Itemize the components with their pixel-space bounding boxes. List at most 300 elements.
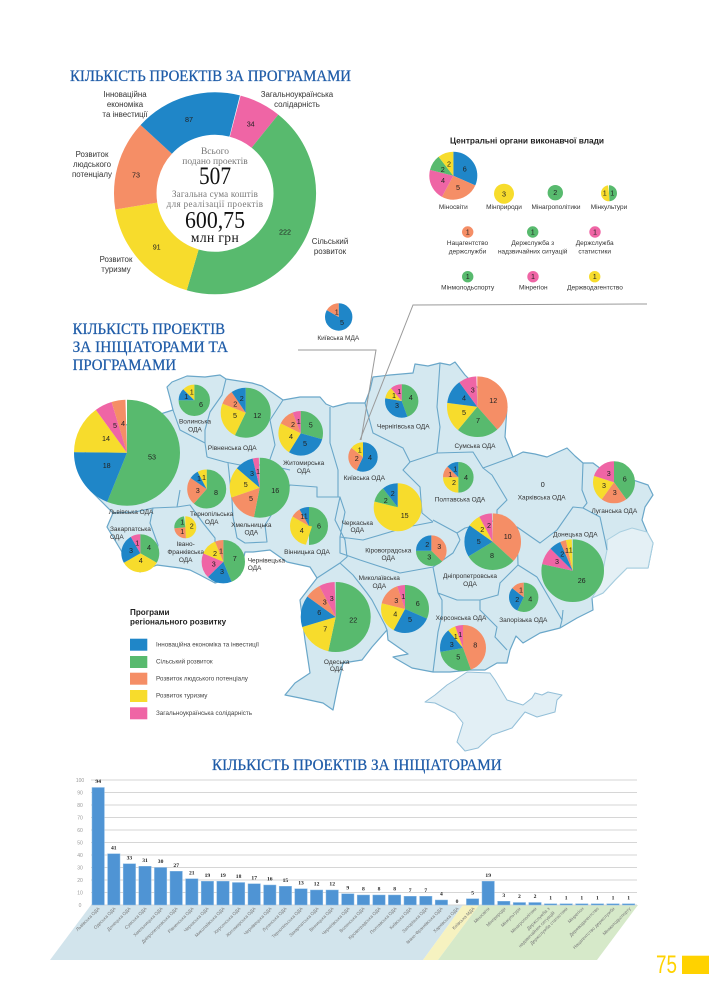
pie: Міносвіти: Міносвіти bbox=[439, 203, 468, 211]
pie: Сумська ОДА: 3 bbox=[471, 386, 475, 394]
pie: Закарпатська ОДА: 4 bbox=[139, 556, 143, 565]
pie: Київська ОДА bbox=[344, 446, 386, 482]
page number bbox=[656, 951, 709, 979]
pie: Чернігівська ОДА: 4 bbox=[409, 393, 413, 402]
pie: Закарпатська ОДА: 1 bbox=[135, 538, 139, 548]
heading: projects by initiators and programmes: ЗА ІНІЦІАТОРАМИ ТА bbox=[73, 339, 229, 356]
pie: Сумська ОДА bbox=[454, 386, 497, 450]
page number: 75 bbox=[656, 951, 677, 979]
pie: Нацагентство держслужби: 1 bbox=[466, 228, 470, 236]
pie: Вінницька ОДА: 6 bbox=[317, 522, 321, 530]
pie: Донецька ОДА bbox=[553, 532, 598, 586]
bar category labels: Кіровоградська ОДА bbox=[347, 906, 382, 940]
pie: Полтавська ОДА bbox=[435, 464, 486, 504]
pie: Полтавська ОДА: 1 bbox=[448, 470, 452, 479]
pie: Хмельницька ОДА: 5 bbox=[244, 480, 248, 489]
bars bbox=[92, 788, 635, 905]
bar category labels: Львівська ОДА bbox=[75, 906, 101, 932]
pie: Тернопільська ОДА: Тернопільська bbox=[190, 510, 234, 518]
bar category labels: Чернівецька ОДА bbox=[243, 906, 273, 936]
pie: Чернігівська ОДА bbox=[377, 387, 430, 430]
bar category labels: Мінприроди bbox=[485, 906, 507, 928]
bar category labels: Мінкультури bbox=[500, 906, 522, 928]
pie: Дніпропетровська ОДА: ОДА bbox=[463, 581, 477, 588]
pie: Донецька ОДА: 1 bbox=[569, 546, 573, 554]
bar category labels: Одеська ОДА bbox=[93, 906, 117, 930]
bar values: 8 bbox=[362, 886, 365, 892]
pie: Мінкультури bbox=[591, 188, 628, 211]
pie: Мінприроди: Мінприроди bbox=[486, 203, 522, 211]
bar values: 5 bbox=[471, 890, 474, 896]
pie: Держслужба статистики: Держслужба bbox=[576, 239, 614, 247]
bar category labels: Житомирська ОДА bbox=[225, 906, 257, 938]
pie: Мінкультури: Мінкультури bbox=[591, 203, 628, 211]
legend: regional development programmes: Інноваційна економіка та інвестиції bbox=[156, 640, 259, 648]
pie: Миколаївська ОДА: 4 bbox=[393, 610, 397, 618]
pie: Черкаська ОДА: ОДА bbox=[350, 527, 365, 534]
pie: Держводагентство: Держводагентство bbox=[567, 284, 623, 292]
pie: Київська МДА bbox=[317, 308, 360, 342]
bar category labels: Миколаївська ОДА bbox=[194, 906, 226, 938]
pie: Черкаська ОДА bbox=[342, 489, 410, 534]
y axis: 90 bbox=[77, 790, 83, 796]
pie: Львівська ОДА: 18 bbox=[103, 461, 111, 470]
donut labels bbox=[72, 90, 348, 274]
pie: Київська ОДА: 1 bbox=[358, 446, 362, 454]
bar values: 18 bbox=[236, 874, 242, 880]
pie: Одеська ОДА: 6 bbox=[317, 608, 321, 617]
bar values: 17 bbox=[251, 876, 257, 882]
donut labels: Розвиток bbox=[100, 255, 133, 264]
bar values bbox=[95, 779, 630, 905]
bar category labels: Черкаська ОДА bbox=[183, 906, 210, 933]
y axis: 60 bbox=[77, 828, 83, 834]
y axis: 80 bbox=[77, 803, 83, 809]
pie: Держводагентство bbox=[567, 271, 623, 292]
pie: Мінрегіон: Мінрегіон bbox=[519, 284, 548, 292]
donut labels: Загальноукраїнська bbox=[261, 90, 334, 99]
pie: Чернівецька ОДА: 1 bbox=[219, 546, 223, 556]
pie: Тернопільська ОДА: 1 bbox=[197, 474, 201, 483]
bar values: 7 bbox=[409, 888, 412, 894]
bar category labels bbox=[75, 906, 632, 950]
donut chart: projects by programmes: 73 bbox=[132, 170, 140, 180]
pie: Волинська ОДА: Волинська bbox=[179, 418, 211, 426]
pie: Одеська ОДА: ОДА bbox=[330, 666, 344, 673]
pie: Держслужба статистики: 1 bbox=[593, 228, 597, 236]
pie: Чернігівська ОДА: Чернігівська ОДА bbox=[377, 422, 430, 430]
y axis: 40 bbox=[77, 853, 83, 859]
pie: Херсонська ОДА: 1 bbox=[458, 630, 462, 639]
pie: Івано-Франківська ОДА: Івано- bbox=[177, 541, 195, 548]
pie: Київська ОДА: 4 bbox=[368, 453, 372, 462]
pie: Мінкультури: 1 bbox=[603, 188, 607, 198]
heading: projects by initiators and programmes bbox=[73, 321, 229, 374]
bar category labels: Закарпатська ОДА bbox=[288, 906, 320, 938]
bar category labels: Рівненська ОДА bbox=[167, 906, 195, 934]
pie: Кіровоградська ОДА: ОДА bbox=[381, 555, 396, 562]
donut labels: потенціалу bbox=[72, 170, 112, 179]
pie: Донецька ОДА: Донецька ОДА bbox=[553, 532, 598, 538]
pie: Кіровоградська ОДА bbox=[365, 540, 441, 562]
pie: Вінницька ОДА bbox=[284, 512, 331, 556]
pie: Тернопільська ОДА: 8 bbox=[214, 488, 218, 497]
pie: Чернівецька ОДА: ОДА bbox=[248, 565, 262, 572]
pie: Хмельницька ОДА: 3 bbox=[250, 469, 254, 478]
donut labels: економіка bbox=[107, 100, 144, 109]
pie: Держслужба з надзвичайних ситуацій: Держслужба з bbox=[511, 239, 554, 247]
pie: Одеська ОДА: 3 bbox=[330, 594, 334, 603]
pie: Держводагентство: 1 bbox=[593, 272, 597, 281]
bar category labels: Запорізька ОДА bbox=[401, 906, 429, 934]
pie: Мінмолодьспорту bbox=[441, 271, 495, 292]
bar values: 31 bbox=[142, 858, 148, 864]
pie: Запорізька ОДА: Запорізька ОДА bbox=[499, 616, 548, 624]
donut labels: туризму bbox=[101, 265, 131, 274]
pie: Запорізька ОДА: 2 bbox=[515, 595, 519, 604]
pie: Сумська ОДА: 12 bbox=[489, 396, 497, 405]
donut chart: projects by programmes: 34 bbox=[247, 120, 255, 128]
y axis bbox=[76, 778, 84, 909]
pie: Рівненська ОДА bbox=[208, 394, 261, 452]
bar values: 1 bbox=[627, 896, 630, 902]
bar category labels: Нацагентство держслужби bbox=[572, 906, 616, 950]
pie: Волинська ОДА: 1 bbox=[184, 392, 188, 401]
bar values: 2 bbox=[518, 894, 521, 900]
pie: Мінагрополітики bbox=[532, 185, 581, 211]
pie: Міносвіти: 4 bbox=[441, 176, 445, 185]
pie: Миколаївська ОДА: 3 bbox=[394, 596, 398, 605]
pie: Волинська ОДА: 6 bbox=[199, 400, 203, 409]
pie: Чернівецька ОДА: 3 bbox=[220, 567, 224, 576]
pie: Одеська ОДА: Одеська bbox=[324, 659, 350, 666]
pie: Рівненська ОДА: 12 bbox=[253, 411, 261, 420]
bar category labels: Івано-Франківська ОДА bbox=[405, 906, 444, 945]
bar values: 12 bbox=[314, 882, 320, 888]
bar category labels: Мінмолодьспорту bbox=[602, 906, 632, 936]
donut centre totals bbox=[167, 147, 263, 245]
pie: Хмельницька ОДА: 5 bbox=[249, 494, 253, 503]
bar values: 41 bbox=[111, 846, 117, 852]
pie: Полтавська ОДА: 1 bbox=[453, 464, 457, 474]
heading: projects by initiators: КІЛЬКІСТЬ ПРОЕКТІВ ЗА ІНІЦІАТОРАМИ bbox=[212, 757, 502, 774]
pie: Полтавська ОДА: 2 bbox=[452, 478, 456, 487]
bar category labels: Волинська ОДА bbox=[338, 906, 366, 933]
y axis: 20 bbox=[77, 878, 83, 884]
pie: Полтавська ОДА: 4 bbox=[464, 473, 468, 482]
pie: Житомирська ОДА: 2 bbox=[291, 420, 295, 429]
heading: projects by programmes: КІЛЬКІСТЬ ПРОЕКТІВ ЗА ПРОГРАМАМИ bbox=[70, 68, 351, 85]
chart base bands bbox=[50, 905, 638, 960]
pie: Івано-Франківська ОДА: ОДА bbox=[179, 557, 193, 564]
pie: Рівненська ОДА: 5 bbox=[233, 411, 237, 420]
bar values: 3 bbox=[502, 893, 505, 899]
pie: Миколаївська ОДА: 1 bbox=[401, 592, 405, 601]
bar values: 13 bbox=[298, 880, 304, 886]
pie: Мінкультури: 1 bbox=[610, 188, 614, 198]
bar values: 19 bbox=[485, 873, 491, 879]
pie: Мінагрополітики: Мінагрополітики bbox=[532, 203, 581, 211]
bar category labels: надзвичайних ситуацій bbox=[517, 909, 556, 948]
bar category labels: Полтавська ОДА bbox=[369, 906, 398, 935]
bar category labels: Луганська ОДА bbox=[261, 906, 288, 933]
pie: Луганська ОДА: 3 bbox=[607, 469, 611, 478]
bar category labels: Мінрегіон bbox=[567, 906, 585, 924]
pie: Івано-Франківська ОДА: 1 bbox=[180, 518, 184, 526]
bar values: 1 bbox=[612, 896, 615, 902]
pie: Запорізька ОДА: 1 bbox=[519, 586, 523, 594]
pie: Сумська ОДА: 7 bbox=[476, 416, 480, 425]
donut centre totals: млн грн bbox=[191, 230, 239, 245]
pie: Миколаївська ОДА: ОДА bbox=[372, 583, 387, 590]
pie: Київська ОДА: Київська ОДА bbox=[344, 475, 386, 482]
pie: Херсонська ОДА: 1 bbox=[454, 632, 458, 641]
donut centre totals: 507 bbox=[199, 163, 231, 190]
pie: Хмельницька ОДА: 16 bbox=[271, 486, 279, 495]
donut centre totals: 600,75 bbox=[185, 208, 245, 234]
pie: Волинська ОДА bbox=[179, 388, 211, 434]
pie: Закарпатська ОДА: 3 bbox=[129, 546, 133, 555]
pie: Донецька ОДА: 26 bbox=[578, 576, 586, 585]
pie: Івано-Франківська ОДА: Франківська bbox=[167, 548, 204, 556]
y axis: 10 bbox=[77, 890, 83, 896]
pie: Чернівецька ОДА: 2 bbox=[213, 549, 217, 558]
pie: Херсонська ОДА: Херсонська ОДА bbox=[436, 615, 487, 622]
pie: Херсонська ОДА: 8 bbox=[473, 640, 477, 650]
bar values: 15 bbox=[283, 878, 288, 884]
pie: Тернопільська ОДА: 3 bbox=[196, 486, 200, 495]
pie: Луганська ОДА: 3 bbox=[613, 488, 617, 497]
pie: Кіровоградська ОДА: 3 bbox=[427, 552, 431, 562]
oblast borders bbox=[113, 363, 607, 672]
pie: Черкаська ОДА: 2 bbox=[384, 496, 388, 505]
pie: Нацагентство держслужби: держслужби bbox=[449, 248, 487, 256]
donut labels: розвиток bbox=[314, 247, 347, 256]
donut centre totals: Всього bbox=[201, 147, 229, 157]
pie: Житомирська ОДА: 1 bbox=[297, 417, 301, 426]
bar values: 21 bbox=[189, 870, 195, 876]
pie: Полтавська ОДА: Полтавська ОДА bbox=[435, 496, 486, 504]
y axis: 0 bbox=[79, 903, 82, 909]
pie: Житомирська ОДА: 4 bbox=[289, 432, 293, 441]
pie: Волинська ОДА: 1 bbox=[190, 388, 194, 396]
bar chart: projects by initiators bbox=[50, 778, 638, 960]
pie: Запорізька ОДА: 4 bbox=[528, 594, 532, 604]
pie: Донецька ОДА: 1 bbox=[565, 546, 569, 555]
pie: Міносвіти: 2 bbox=[441, 165, 445, 174]
pie: Дніпропетровська ОДА: 2 bbox=[480, 525, 484, 534]
pie: Львівська ОДА bbox=[100, 419, 156, 516]
legend: regional development programmes: Розвиток людського потенціалу bbox=[156, 675, 249, 683]
donut labels: Сільський bbox=[312, 237, 348, 246]
pie: Сумська ОДА: Сумська ОДА bbox=[454, 443, 496, 450]
pie: Херсонська ОДА: 3 bbox=[450, 640, 454, 649]
pie: Миколаївська ОДА: 5 bbox=[408, 615, 412, 624]
pie: Хмельницька ОДА bbox=[231, 467, 279, 536]
donut labels: людського bbox=[73, 160, 112, 169]
legend: regional development programmes: Програми bbox=[130, 608, 170, 617]
pie: Рівненська ОДА: 2 bbox=[240, 394, 244, 403]
pie: Держслужба статистики bbox=[576, 226, 614, 256]
bar values: 1 bbox=[580, 896, 583, 902]
pie: Одеська ОДА bbox=[317, 594, 357, 673]
pie: Рівненська ОДА: 2 bbox=[233, 400, 237, 408]
pie: Закарпатська ОДА: 4 bbox=[147, 543, 151, 552]
pie: Львівська ОДА: 14 bbox=[102, 434, 110, 443]
pie: Мінрегіон: 1 bbox=[531, 272, 535, 281]
bar category labels: Мінагрополітики bbox=[510, 906, 538, 934]
pie: Нацагентство держслужби bbox=[447, 226, 488, 256]
bar values: 94 bbox=[95, 779, 101, 785]
pie: Луганська ОДА: 3 bbox=[602, 481, 606, 490]
pie: Держслужба з надзвичайних ситуацій: надзвичайних ситуацій bbox=[498, 248, 568, 256]
pie: Мінагрополітики: 2 bbox=[553, 188, 557, 197]
bar category labels: Дніпропетровська ОДА bbox=[140, 906, 179, 944]
pie: Житомирська ОДА: 5 bbox=[303, 439, 307, 448]
pie: Мінмолодьспорту: 1 bbox=[466, 272, 470, 281]
legend: regional development programmes: регіонального розвитку bbox=[130, 617, 227, 626]
pie: Тернопільська ОДА bbox=[190, 473, 234, 526]
pie: Тернопільська ОДА: ОДА bbox=[205, 519, 219, 526]
bar values: 4 bbox=[440, 892, 443, 898]
pie: Донецька ОДА: 2 bbox=[560, 550, 564, 558]
bar values: 30 bbox=[158, 859, 164, 865]
callout lines for Kyiv bbox=[298, 304, 647, 440]
pie: Закарпатська ОДА: ОДА bbox=[110, 534, 124, 541]
pie: Миколаївська ОДА bbox=[359, 575, 420, 624]
pie: Львівська ОДА: Львівська ОДА bbox=[109, 508, 154, 516]
pie: Мінприроди: 3 bbox=[502, 190, 506, 198]
pie: Житомирська ОДА: Житомирська bbox=[283, 460, 325, 467]
pie: Дніпропетровська ОДА: Дніпропетровська bbox=[443, 572, 497, 580]
bar values: 0 bbox=[456, 899, 459, 905]
bar category labels: Хмельницька ОДА bbox=[132, 906, 164, 938]
pie: Вінницька ОДА: 1 bbox=[300, 512, 304, 521]
donut labels: солідарність bbox=[274, 100, 320, 109]
pie: Чернівецька ОДА: 7 bbox=[233, 554, 237, 563]
donut chart: projects by programmes: 91 bbox=[153, 242, 161, 252]
pie: Івано-Франківська ОДА: 2 bbox=[190, 522, 194, 530]
y axis: 100 bbox=[76, 778, 84, 784]
pie: Волинська ОДА: ОДА bbox=[188, 426, 202, 434]
pie: Вінницька ОДА: Вінницька ОДА bbox=[284, 548, 331, 556]
bar values: 16 bbox=[267, 876, 273, 882]
pie: Херсонська ОДА: 5 bbox=[456, 652, 460, 662]
bar category labels: Сумська ОДА bbox=[124, 906, 148, 930]
pie: Житомирська ОДА bbox=[283, 417, 325, 475]
pie: Черкаська ОДА: 2 bbox=[391, 489, 395, 498]
donut labels: Розвиток bbox=[76, 150, 109, 159]
pie: Мінмолодьспорту: Мінмолодьспорту bbox=[441, 284, 495, 292]
label: Харківська ОДА bbox=[518, 480, 566, 502]
y axis: 50 bbox=[77, 840, 83, 846]
pie: Миколаївська ОДА: Миколаївська bbox=[359, 575, 400, 582]
bar category labels: Чернігівська ОДА bbox=[321, 906, 351, 936]
pie: Кіровоградська ОДА: 3 bbox=[437, 542, 441, 551]
central bodies title: Центральні органи виконавчої влади bbox=[450, 136, 604, 146]
pie: Хмельницька ОДА: Хмельницька bbox=[231, 522, 272, 529]
pie: Рівненська ОДА: Рівненська ОДА bbox=[208, 444, 257, 452]
pie: Херсонська ОДА bbox=[436, 615, 487, 662]
y axis: 70 bbox=[77, 816, 83, 822]
donut centre totals: Загальна сума коштів bbox=[172, 189, 258, 199]
pie: Івано-Франківська ОДА bbox=[167, 518, 204, 564]
panel: central executive bodies bbox=[439, 136, 628, 292]
pie: Запорізька ОДА bbox=[499, 586, 548, 624]
label: Харківська ОДА: Харківська ОДА bbox=[518, 494, 566, 502]
pie: Чернігівська ОДА: 1 bbox=[392, 391, 396, 400]
bar category labels: Херсонська ОДА bbox=[213, 906, 242, 935]
legend: regional development programmes bbox=[130, 608, 259, 719]
legend: regional development programmes: Сільський розвиток bbox=[156, 657, 213, 665]
pie: Черкаська ОДА: Черкаська bbox=[342, 520, 373, 527]
pie: Луганська ОДА bbox=[591, 469, 638, 515]
pie: Вінницька ОДА: 1 bbox=[304, 512, 308, 520]
pie: Івано-Франківська ОДА: 1 bbox=[180, 527, 184, 536]
label: Харківська ОДА: 0 bbox=[541, 480, 545, 489]
donut chart: projects by programmes: 87 bbox=[185, 115, 193, 124]
pie: Чернівецька ОДА: 3 bbox=[212, 560, 216, 568]
pie: Тернопільська ОДА: 1 bbox=[202, 473, 206, 482]
pie: Мінприроди bbox=[486, 184, 522, 211]
pie: Закарпатська ОДА bbox=[110, 526, 151, 565]
donut centre totals: подано проектів bbox=[182, 157, 248, 167]
donut labels: та інвестиції bbox=[102, 110, 148, 119]
pie: Одеська ОДА: 3 bbox=[323, 598, 327, 606]
pie: Кіровоградська ОДА: Кіровоградська bbox=[365, 546, 412, 554]
bar values: 8 bbox=[378, 886, 381, 892]
pie: Донецька ОДА: 3 bbox=[555, 557, 559, 566]
pie: Одеська ОДА: 22 bbox=[349, 616, 357, 624]
pie: Держслужба з надзвичайних ситуацій bbox=[498, 226, 568, 256]
bar values: 9 bbox=[346, 886, 349, 892]
donut chart: projects by programmes bbox=[118, 96, 312, 291]
pie: Черкаська ОДА: 15 bbox=[401, 511, 409, 520]
bar category labels: Держслужба з bbox=[526, 906, 551, 931]
occupied east territory bbox=[592, 528, 653, 598]
pie: Чернігівська ОДА: 3 bbox=[395, 401, 399, 410]
pie: Міносвіти bbox=[439, 160, 468, 211]
donut chart: projects by programmes: 222 bbox=[279, 228, 291, 236]
pie: Держслужба статистики: статистики bbox=[578, 248, 611, 256]
bar category labels: Держводагентство bbox=[568, 906, 600, 938]
pie: Вінницька ОДА: 4 bbox=[300, 526, 304, 535]
pie: Чернівецька ОДА bbox=[212, 546, 285, 576]
pie: Київська МДА: Київська МДА bbox=[317, 335, 360, 342]
bar category labels: Харківська ОДА bbox=[432, 906, 460, 934]
pie: Миколаївська ОДА: 6 bbox=[416, 599, 420, 608]
pie: Хмельницька ОДА: 1 bbox=[256, 467, 260, 476]
legend: regional development programmes: Розвиток туризму bbox=[156, 692, 208, 699]
pie: Кіровоградська ОДА: 2 bbox=[425, 540, 429, 549]
pie: Луганська ОДА: 6 bbox=[623, 474, 627, 484]
pie: Одеська ОДА: 7 bbox=[323, 624, 327, 634]
pie: Дніпропетровська ОДА bbox=[443, 521, 512, 588]
pie: Міносвіти: 2 bbox=[447, 160, 451, 168]
pie: Львівська ОДА: 5 bbox=[113, 421, 117, 430]
bar values: 2 bbox=[534, 894, 537, 900]
bar category labels: Київська МДА bbox=[451, 906, 476, 931]
pie: Хмельницька ОДА: ОДА bbox=[244, 530, 259, 536]
pie: Львівська ОДА: 53 bbox=[148, 452, 156, 462]
pie: Львівська ОДА: 4 bbox=[121, 419, 125, 428]
pie: Сумська ОДА: 5 bbox=[462, 408, 466, 417]
pie: Мінрегіон bbox=[519, 271, 548, 292]
bar category labels: Міносвіти bbox=[473, 906, 491, 924]
pie: Чернівецька ОДА: Чернівецька bbox=[248, 556, 285, 564]
pie: Дніпропетровська ОДА: 2 bbox=[487, 521, 491, 530]
bar category labels: Донецька ОДА bbox=[106, 906, 132, 932]
